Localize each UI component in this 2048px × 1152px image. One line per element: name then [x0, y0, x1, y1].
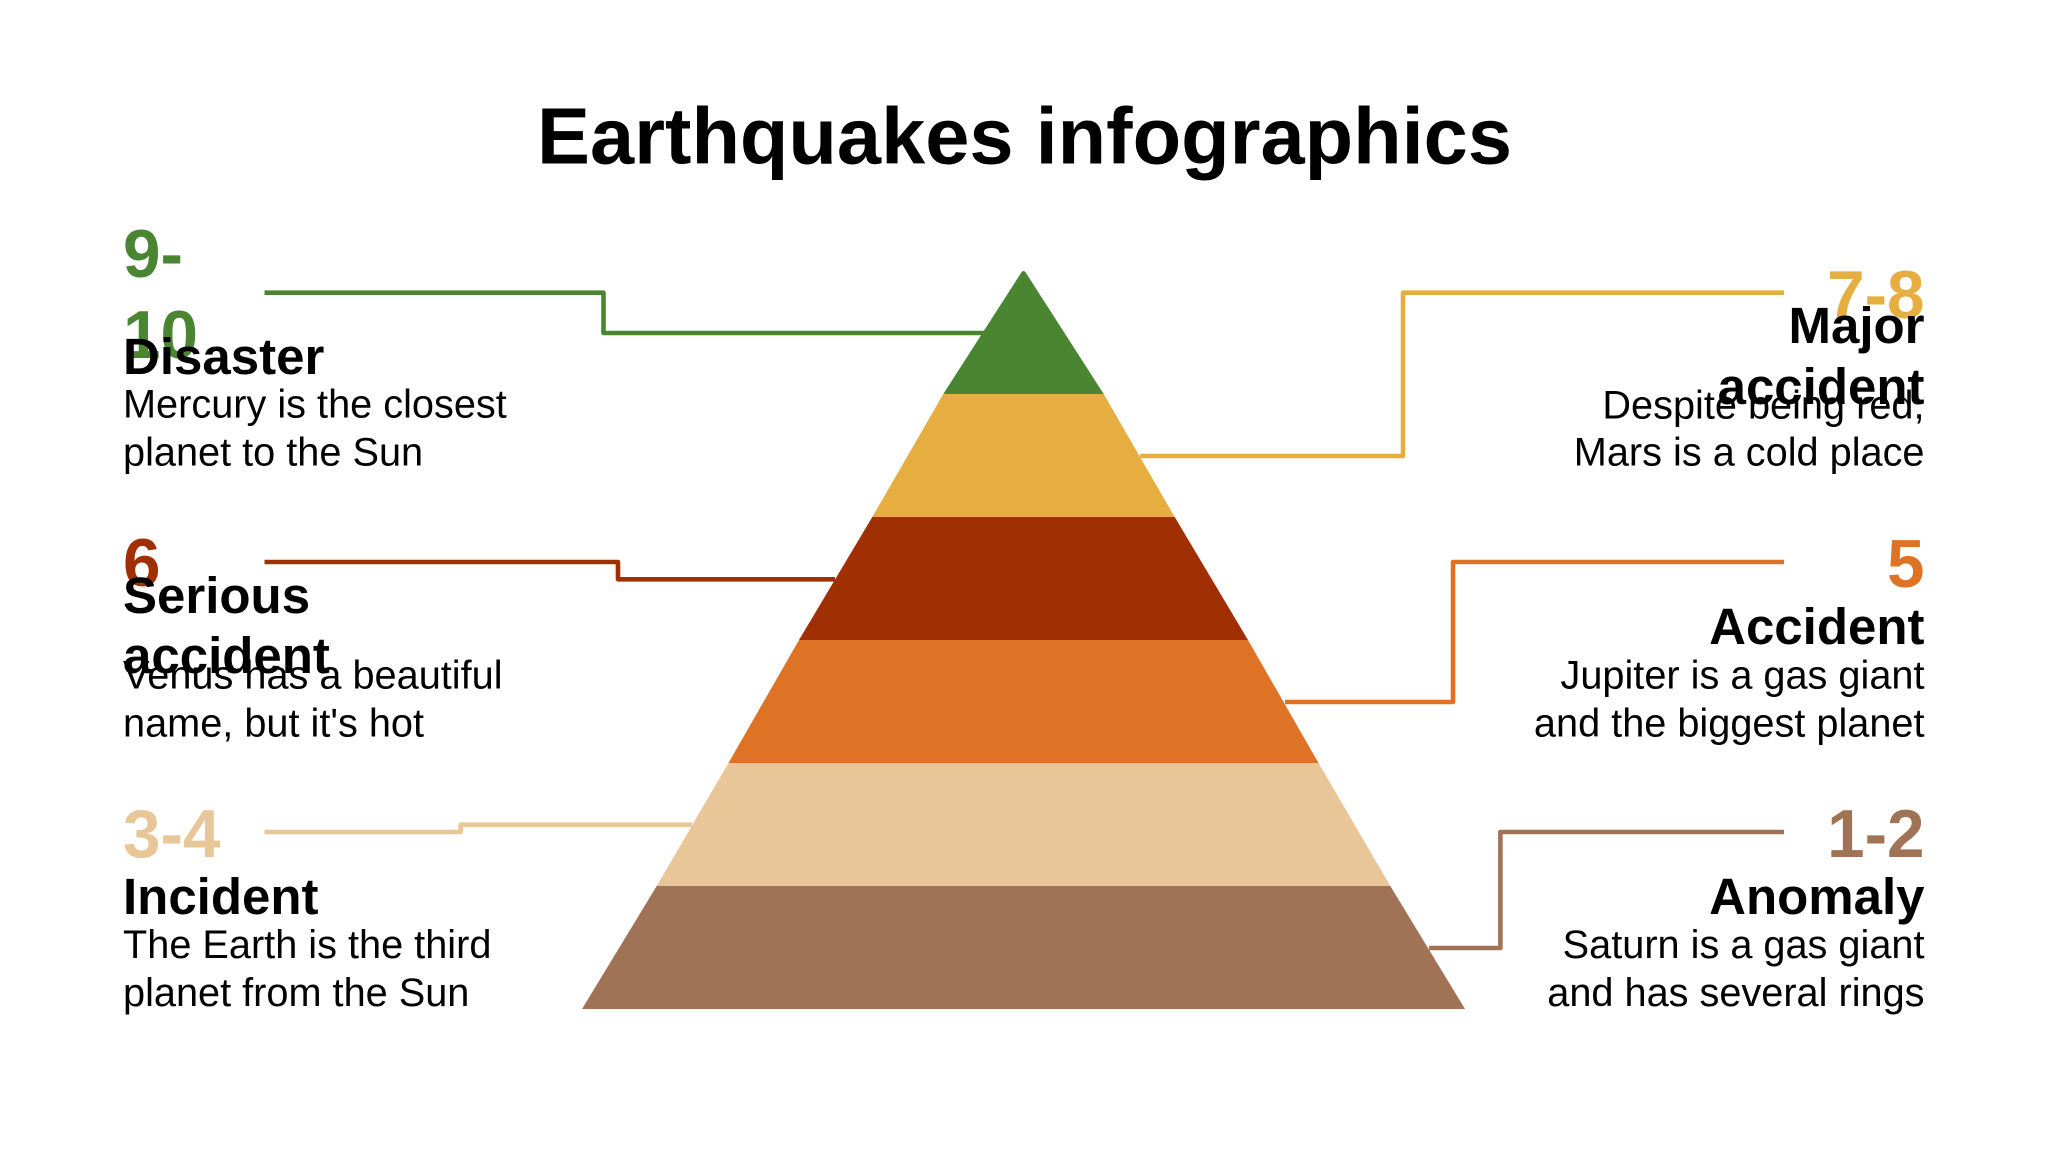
pyramid layer: 5 accident [728, 640, 1319, 763]
heading: serious accident: Serious [123, 567, 310, 624]
text: earth: The Earth is the third [123, 923, 491, 967]
heading: major accident: accident [1718, 358, 1925, 415]
number: 7-8: 7-8 [1827, 258, 1924, 333]
number: 9-10: 9- [123, 217, 183, 292]
connector: incident [264, 825, 692, 832]
text: mars: Despite being red, [1602, 383, 1924, 427]
text: saturn: and has several rings [1547, 971, 1924, 1015]
heading: accident: Accident [1709, 598, 1925, 655]
number: 3-4: 3-4 [123, 797, 221, 872]
number: 9-10: 10 [123, 298, 198, 373]
panel: accident [1534, 527, 1925, 745]
panel: anomaly [1547, 797, 1925, 1015]
pyramid layer: 6 serious accident [799, 517, 1248, 640]
text: mercury: Mercury is the closest [123, 383, 507, 427]
number: 1-2: 1-2 [1827, 797, 1924, 872]
panel: serious accident [123, 526, 503, 745]
panel: disaster [123, 217, 507, 475]
heading: serious accident: accident [123, 627, 330, 684]
text: jupiter: Jupiter is a gas giant [1560, 653, 1924, 697]
pyramid chart [582, 271, 1465, 1009]
text: venus: Venus has a beautiful [123, 653, 503, 697]
panel: incident [123, 797, 491, 1015]
text: earth: planet from the Sun [123, 971, 469, 1015]
connector: accident [1285, 562, 1784, 702]
pyramid layer: 1-2 anomaly [582, 886, 1465, 1009]
text: saturn: Saturn is a gas giant [1563, 923, 1924, 967]
heading: incident: Incident [123, 868, 319, 925]
text: mercury: planet to the Sun [123, 431, 423, 475]
text: venus: name, but it's hot [123, 701, 424, 745]
pyramid layer: 7-8 major accident [872, 394, 1175, 517]
heading: major accident: Major [1788, 297, 1924, 354]
title: Earthquakes infographics [537, 91, 1512, 180]
heading: anomaly: Anomaly [1709, 868, 1925, 925]
connector: disaster [264, 293, 985, 333]
pyramid layer: 9-10 disaster [943, 271, 1104, 394]
panel: major accident [1574, 258, 1925, 475]
connector: anomaly [1429, 832, 1784, 948]
number: 6: 6 [123, 526, 160, 601]
text: jupiter: and the biggest planet [1534, 701, 1924, 745]
pyramid layer: 3-4 incident [657, 763, 1390, 886]
number: 5: 5 [1887, 527, 1924, 602]
connector: major accident [1140, 293, 1784, 456]
connector: serious accident [264, 562, 835, 579]
heading: disaster: Disaster [123, 328, 324, 385]
text: mars: Mars is a cold place [1574, 431, 1924, 475]
